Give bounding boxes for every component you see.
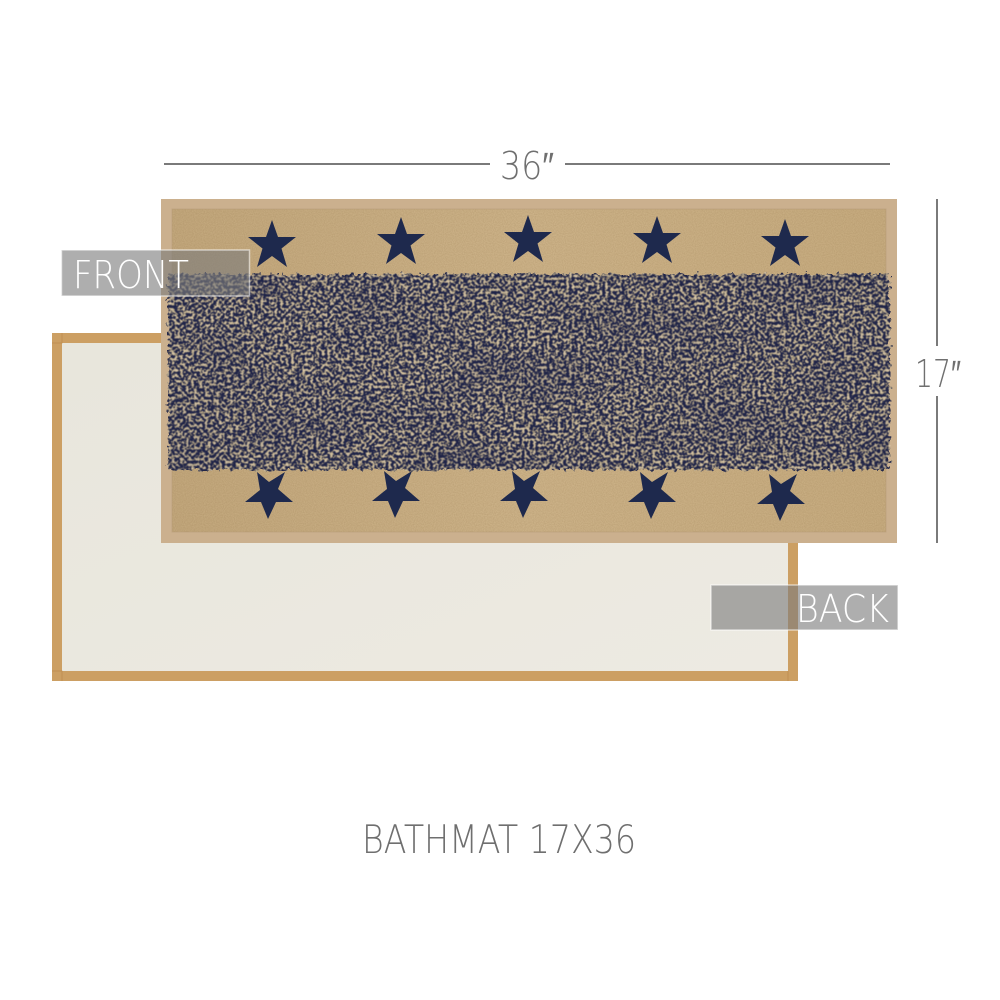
back label [711, 585, 898, 631]
star 6 [245, 472, 293, 519]
back label: BACK [796, 587, 889, 631]
front of bathmat [161, 199, 897, 543]
star 7 [372, 471, 420, 518]
front label [62, 250, 250, 297]
back binding [52, 333, 798, 681]
star 1 [248, 220, 296, 267]
product title: BATHMAT 17X36 [362, 818, 636, 863]
star 10 [757, 474, 805, 521]
front binding [161, 199, 897, 543]
height label: 17″ [915, 352, 961, 396]
star 8 [500, 471, 548, 518]
bottom row of stars [245, 471, 805, 521]
burlap field [172, 209, 886, 532]
back cream surface [62, 343, 788, 671]
star 2 [377, 217, 425, 264]
top row of stars [248, 215, 809, 267]
star 5 [761, 219, 809, 266]
star 9 [628, 472, 676, 519]
chenille shag centre [168, 274, 890, 470]
back of bathmat [52, 333, 798, 681]
width label: 36″ [500, 144, 554, 188]
star 4 [633, 216, 681, 263]
front label: FRONT [73, 253, 189, 297]
star 3 [504, 215, 552, 262]
